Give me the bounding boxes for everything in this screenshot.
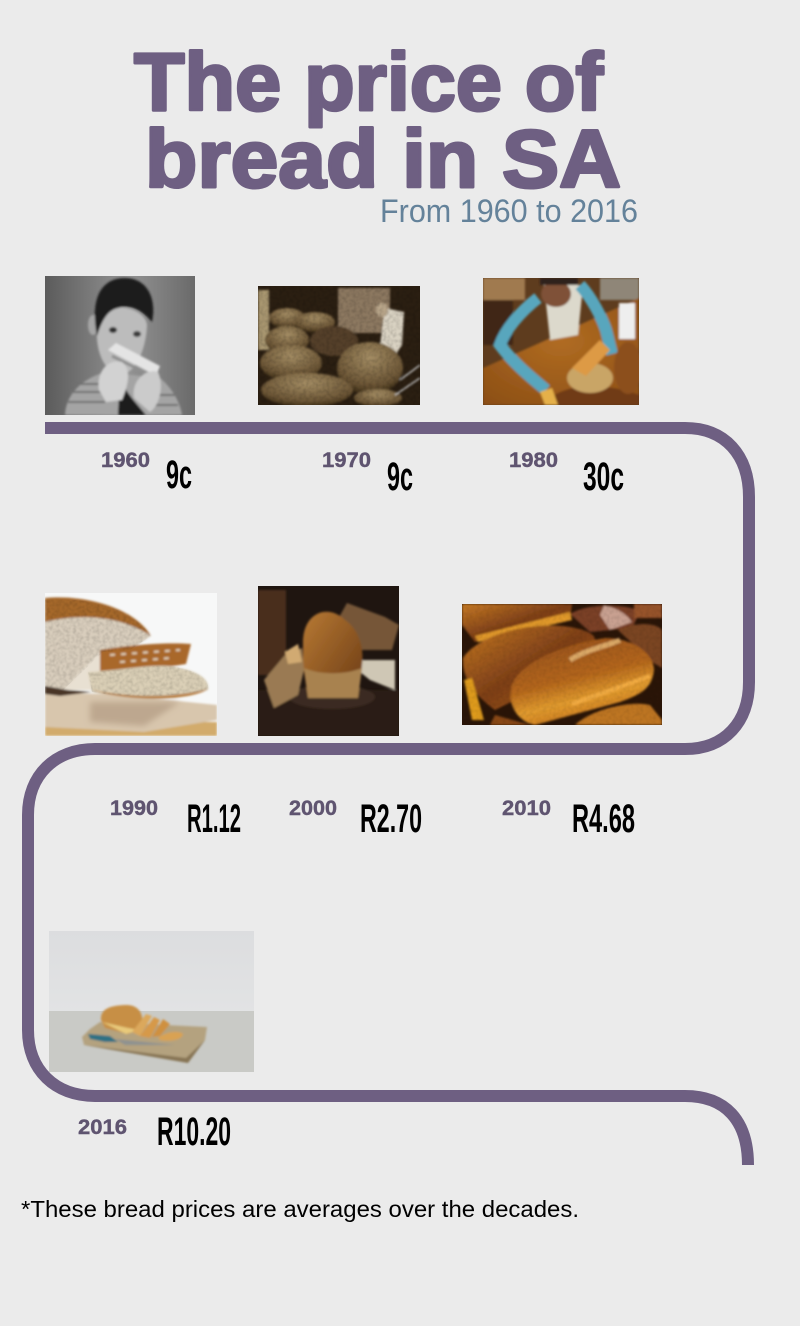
price: R2.70: R2.70 bbox=[360, 797, 422, 841]
title bbox=[134, 37, 621, 205]
title: bread in SA bbox=[145, 114, 621, 205]
price: 9c: 9c bbox=[166, 453, 192, 497]
label: 2016: 2016 bbox=[78, 1116, 127, 1139]
photo: loaf on a dark table, 2000 bbox=[258, 586, 399, 736]
title: The price of bbox=[134, 37, 604, 128]
price: 30c: 30c bbox=[583, 455, 624, 499]
photo: boy eating bread, 1960 bbox=[45, 276, 195, 415]
footnote: *These bread prices are averages over the decades. bbox=[21, 1196, 579, 1222]
timeline path bbox=[28, 428, 749, 1165]
photo: sliced seeded loaf on a board, 1990 bbox=[45, 593, 217, 736]
label: 1990: 1990 bbox=[110, 797, 158, 820]
price: R4.68: R4.68 bbox=[572, 797, 635, 841]
label: 1960: 1960 bbox=[101, 449, 150, 472]
price: R10.20: R10.20 bbox=[157, 1110, 231, 1154]
price: R1.12: R1.12 bbox=[187, 797, 241, 841]
subtitle: From 1960 to 2016 bbox=[380, 193, 638, 229]
photo: woman at a bread counter, 1980 bbox=[483, 278, 639, 405]
price: 9c: 9c bbox=[387, 455, 413, 499]
photo: loaves in a bakery, 1970 bbox=[258, 286, 420, 405]
photo: golden bread loaves, 2010 bbox=[462, 604, 662, 725]
photo: sliced loaf and knife on a wooden board, 2016 bbox=[49, 931, 254, 1072]
label: 1980: 1980 bbox=[509, 449, 558, 472]
label: 2000: 2000 bbox=[289, 797, 337, 820]
label: 1970: 1970 bbox=[322, 449, 371, 472]
label: 2010: 2010 bbox=[502, 797, 551, 820]
